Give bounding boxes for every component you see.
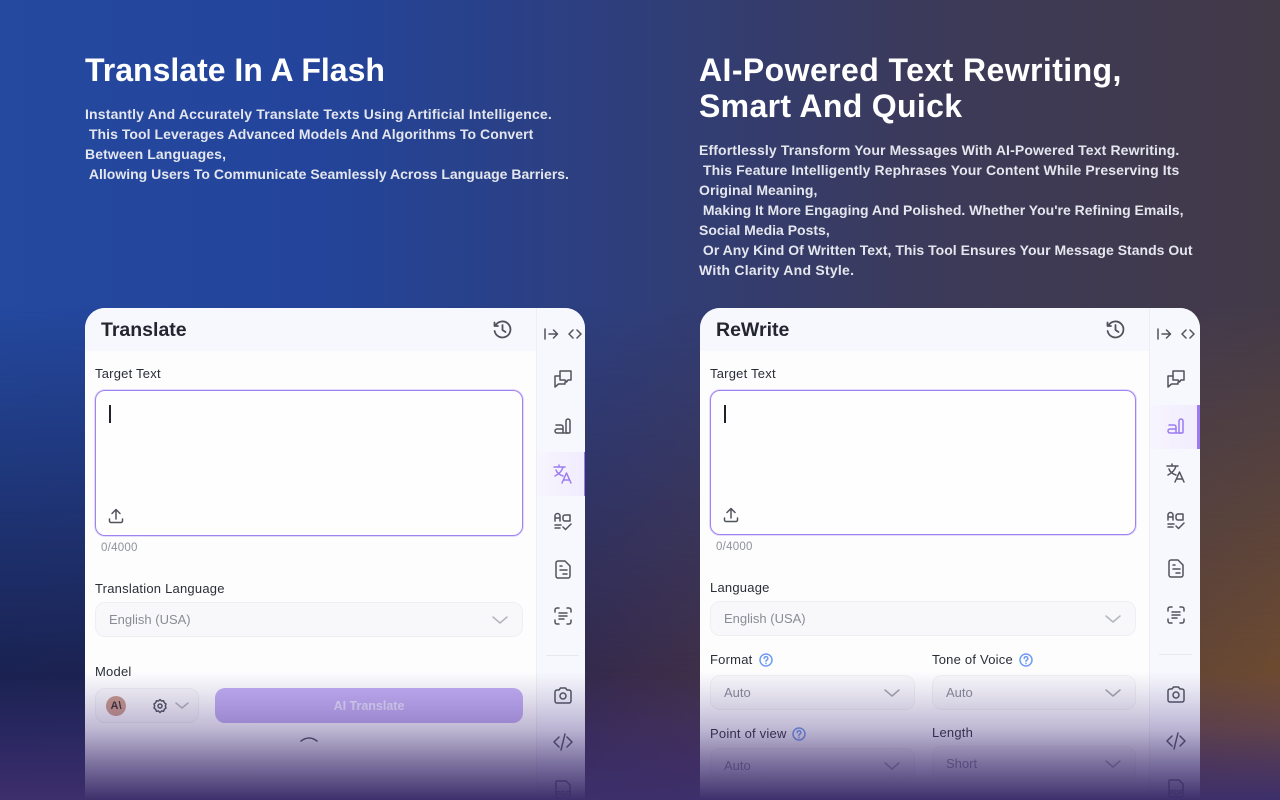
select: tone of voice [932, 675, 1136, 710]
divider [1159, 654, 1192, 655]
heading: AI-Powered Text Rewriting [699, 52, 1122, 124]
icon: pen [1167, 418, 1184, 434]
text input box [95, 390, 523, 536]
icon: collapse [544, 328, 582, 340]
icon: PDF: PDF [1169, 790, 1184, 797]
text block: rewrite description: Original Meaning, [699, 182, 817, 198]
text block: rewrite description: Social Media Posts, [699, 222, 830, 238]
icon: camera [554, 687, 572, 704]
icon: history [1106, 320, 1124, 338]
select: point of view: Auto [724, 758, 751, 773]
character counter: 0/4000 [716, 541, 753, 553]
label: target text: Target Text [95, 366, 161, 381]
text cursor [724, 405, 726, 423]
text block: translate description: Instantly And Accurately Translate Texts Using Artificial Intelligence. [85, 106, 552, 122]
label: length: Length [932, 725, 973, 740]
icon: settings gear [153, 698, 167, 714]
active tab marker [584, 452, 586, 496]
icon: scan text [554, 607, 572, 625]
icon: model avatar: A\ [110, 700, 122, 712]
icon: grammar check [554, 512, 572, 530]
panel header [700, 308, 1149, 351]
select: point of view [710, 748, 915, 783]
label: language: Language [710, 580, 770, 595]
icon: grammar check [1167, 512, 1185, 530]
select: length: Short [946, 756, 977, 771]
icon: chat [554, 370, 572, 388]
panel header [85, 308, 536, 351]
panel title: ReWrite [716, 319, 789, 341]
text block: rewrite description: Or Any Kind Of Written Text, This Tool Ensures Your Message Stands Out [703, 242, 1193, 258]
icon: translate [553, 464, 572, 484]
active tab: rewrite [1150, 405, 1200, 449]
icon: PDF [555, 780, 571, 798]
icon: code [553, 733, 573, 751]
select: language [710, 601, 1136, 636]
select: language: English (USA) [109, 612, 191, 627]
icon: code [1166, 732, 1186, 750]
text cursor [109, 405, 110, 423]
text block: rewrite description: This Feature Intelligently Rephrases Your Content While Preserving Its [703, 162, 1179, 178]
icon: model avatar [106, 696, 126, 716]
text block: rewrite description: Effortlessly Transform Your Messages With AI-Powered Text Rewriting. [699, 142, 1179, 158]
active tab: translate [537, 452, 586, 496]
icon: history [494, 320, 512, 338]
panel: ReWrite [700, 308, 1200, 800]
icon: document [1168, 559, 1184, 578]
heading: AI-Powered Text Rewriting: Smart And Quick [699, 88, 962, 124]
label: translation language: Translation Language [95, 581, 225, 596]
button: AI Translate [215, 688, 523, 723]
select: length [932, 746, 1136, 781]
character counter: 0/4000 [101, 542, 138, 554]
text input box [710, 390, 1136, 535]
label: point of view: Point of view [710, 726, 787, 741]
icon: collapse chevron [300, 737, 318, 742]
select: format [710, 675, 915, 710]
text block: rewrite description [699, 142, 1193, 278]
icon: scan text [1167, 606, 1185, 624]
icon: PDF: PDF [556, 791, 571, 798]
text block: rewrite description: Making It More Engaging And Polished. Whether You're Refining Emails, [703, 202, 1184, 218]
icon: chat [1167, 370, 1185, 388]
icon: document [555, 560, 571, 579]
icon: tone help [1019, 653, 1033, 667]
text block: translate description: This Tool Leverages Advanced Models And Algorithms To Convert [89, 126, 533, 142]
icon: PDF [1168, 779, 1184, 797]
select: format: Auto [724, 685, 751, 700]
select: tone of voice: Auto [946, 685, 973, 700]
divider [546, 655, 579, 656]
select: language [95, 602, 523, 637]
icon: pen [554, 418, 571, 434]
heading: Translate In A Flash: Translate In A Flash [85, 52, 385, 88]
select: language: English (USA) [724, 611, 806, 626]
text block: translate description: Between Languages, [85, 146, 226, 162]
panel title: Translate [101, 319, 187, 341]
bottom purple fade overlay [0, 672, 1280, 800]
label: target text: Target Text [710, 366, 776, 381]
label: model: Model [95, 664, 132, 679]
label: format: Format [710, 652, 752, 667]
sidebar [1149, 308, 1200, 800]
text block: translate description [85, 106, 569, 182]
icon: camera [1167, 686, 1185, 703]
label: tone of voice: Tone of Voice [932, 652, 1013, 667]
text block: rewrite description: With Clarity And Style. [699, 262, 854, 278]
active tab marker [1197, 405, 1200, 449]
icon: translate [1166, 463, 1185, 483]
select: model [95, 688, 199, 723]
icon: format help [759, 653, 773, 667]
icon: upload [108, 508, 124, 524]
icon: collapse [1157, 328, 1195, 340]
text block: translate description: Allowing Users To Communicate Seamlessly Across Language Barriers. [89, 166, 569, 182]
panel: Translate [85, 308, 585, 800]
heading: AI-Powered Text Rewriting: AI-Powered Text Rewriting, [699, 52, 1122, 88]
icon: upload [724, 508, 738, 522]
button: AI Translate: AI Translate [334, 699, 404, 713]
icon: point of view help [792, 727, 806, 741]
sidebar [536, 308, 586, 800]
